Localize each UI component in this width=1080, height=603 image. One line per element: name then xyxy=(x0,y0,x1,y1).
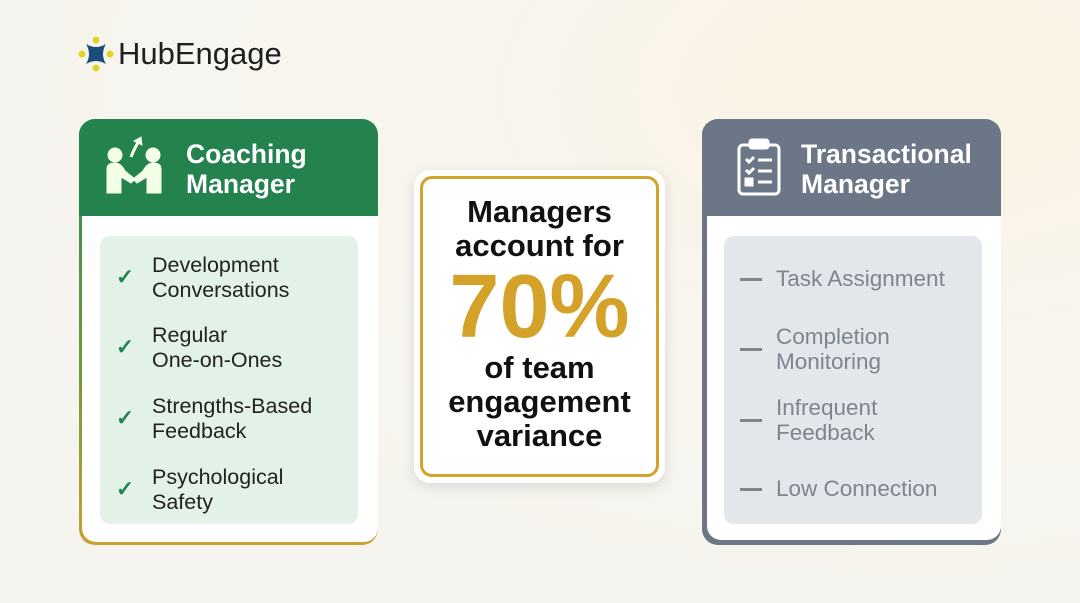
panel: coaching manager xyxy=(79,119,378,545)
checklist: Feedback xyxy=(152,419,246,443)
list: Monitoring xyxy=(776,349,881,374)
list: Completion xyxy=(776,324,890,349)
header xyxy=(702,119,1001,216)
logo text: HubEngage xyxy=(118,36,282,71)
big number: 70% xyxy=(449,257,630,357)
checklist: ✓ xyxy=(116,406,134,430)
checklist: Strengths-Based xyxy=(152,394,312,418)
checklist: One-on-Ones xyxy=(152,348,282,372)
center stat callout: variance xyxy=(477,418,602,453)
header: Coaching xyxy=(186,139,307,169)
center stat callout: account for xyxy=(455,228,624,263)
checklist: Psychological xyxy=(152,465,283,489)
checklist xyxy=(100,236,358,524)
list: Feedback xyxy=(776,420,875,445)
icon: handshake xyxy=(106,136,162,194)
checklist: Conversations xyxy=(152,278,289,302)
list: Low Connection xyxy=(776,476,937,501)
list: Infrequent xyxy=(776,395,877,420)
checklist: ✓ xyxy=(116,477,134,501)
header xyxy=(79,119,378,216)
logo xyxy=(78,36,282,72)
header: Manager xyxy=(801,169,910,199)
checklist: Development xyxy=(152,253,279,277)
checklist: ✓ xyxy=(116,265,134,289)
panel: transactional manager xyxy=(702,119,1001,545)
icon: logo mark xyxy=(78,36,114,72)
list xyxy=(724,236,982,524)
center stat callout: of team xyxy=(484,350,595,385)
header: Transactional xyxy=(801,139,972,169)
list: Task Assignment xyxy=(776,266,945,291)
center stat callout: engagement xyxy=(448,384,631,419)
checklist: Safety xyxy=(152,490,213,514)
center stat callout xyxy=(414,170,665,483)
center stat callout: Managers xyxy=(467,194,612,229)
header: Manager xyxy=(186,169,295,199)
checklist: Regular xyxy=(152,323,227,347)
checklist: ✓ xyxy=(116,335,134,359)
icon: clipboard xyxy=(738,138,780,196)
